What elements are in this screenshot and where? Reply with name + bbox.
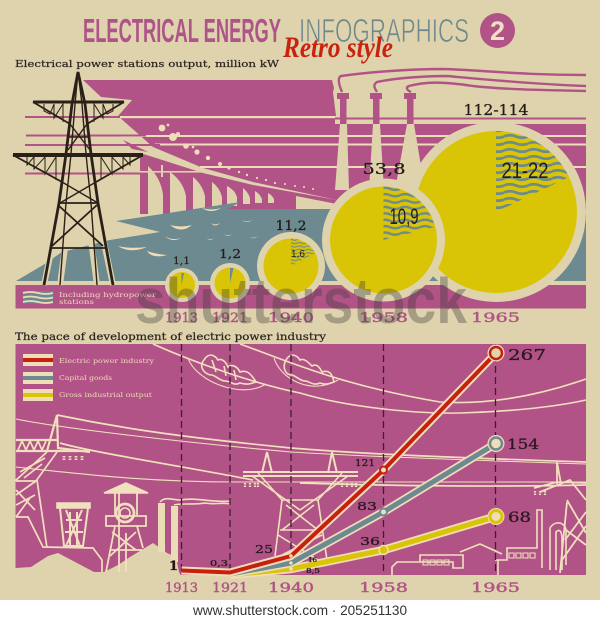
chart values: 267 <box>508 346 546 364</box>
pie chart: 1940: 1,6 <box>291 249 305 260</box>
series: capital goods <box>230 435 504 574</box>
bottom chart year axis <box>165 581 520 596</box>
smoke trails <box>339 69 586 92</box>
chart legend <box>23 354 154 401</box>
pie chart: 1965 <box>406 101 586 302</box>
top chart year axis: 1965 <box>471 311 520 326</box>
legend text: stations <box>59 298 94 306</box>
panel: development line chart background <box>15 344 586 576</box>
footer strip: www.shutterstock.com · 205251130 <box>192 602 407 618</box>
horizontal power lines <box>118 116 586 168</box>
chart values: 36 <box>360 534 380 548</box>
pie chart: 1913: 1,1 <box>173 255 190 267</box>
number badge: 2 <box>490 16 505 46</box>
chart values: 121 <box>355 458 375 469</box>
pie chart: 1921: 1,2 <box>219 246 241 261</box>
top chart year axis: 1921 <box>212 311 248 326</box>
left lattice tower <box>15 415 102 572</box>
chart values: 25 <box>255 542 273 556</box>
series: gross industrial output <box>230 508 504 575</box>
spray dots <box>159 124 314 190</box>
legend band <box>16 285 586 308</box>
pie chart: 1958 <box>322 160 445 302</box>
water <box>16 202 586 281</box>
pie chart: 1958: 10,9 <box>390 204 418 229</box>
chimneys <box>335 93 425 190</box>
chart values: 1 <box>169 559 178 574</box>
centre lattice tower <box>243 452 358 560</box>
transmission tower <box>13 72 143 285</box>
chart values: 16 <box>308 557 317 564</box>
insulator clusters <box>188 355 338 390</box>
chart values: 68 <box>508 510 531 526</box>
wave legend <box>23 291 157 306</box>
bridge deck and piers <box>140 153 337 214</box>
mine headframe <box>57 503 90 546</box>
small chimneys and smoke <box>158 499 230 562</box>
magenta background: sky <box>83 80 586 226</box>
title: ELECTRICAL ENERGY <box>83 12 281 49</box>
pie chart: 1913 <box>165 255 199 302</box>
heading: pace of development: The pace of development of electric power industry <box>15 332 327 343</box>
bottom chart year axis: 1913 <box>165 581 198 596</box>
series: electric power industry <box>182 344 504 572</box>
top chart year axis: 1913 <box>165 311 198 326</box>
title: INFOGRAPHICS <box>299 12 469 49</box>
panel: power stations illustration <box>16 69 586 308</box>
pie chart: 1965: 112-114 <box>464 101 528 119</box>
line chart series <box>182 344 504 575</box>
subtitle: retro style: Retro style <box>282 31 393 64</box>
chart values: 83 <box>357 499 377 513</box>
pie chart: 1958: 53,8 <box>362 160 406 178</box>
bottom chart year axis: 1921 <box>212 581 248 596</box>
top chart year axis: 1958 <box>359 311 408 326</box>
chart values: 0,3 <box>210 559 228 568</box>
bottom chart year axis: 1940 <box>268 581 314 596</box>
footer strip <box>0 600 600 620</box>
legend wave icon <box>23 291 53 304</box>
top chart year axis <box>165 311 520 326</box>
overhead cables <box>16 344 586 486</box>
legend: capital goods: Capital goods <box>59 374 113 382</box>
water ripples <box>118 208 258 256</box>
chart values: 154 <box>507 437 539 453</box>
chart values <box>169 346 546 575</box>
legend: gross industrial output: Gross industrial output <box>59 391 152 399</box>
legend text: Including hydropower <box>59 291 157 299</box>
right lattice tower <box>534 462 586 573</box>
chart values: 8,5 <box>306 568 320 575</box>
factory outline <box>392 510 566 575</box>
number badge <box>480 13 515 48</box>
pie chart: 1940 <box>257 219 325 300</box>
legend: electric power industry: Electric power industry <box>59 357 154 365</box>
stock watermark: shutterstock <box>135 265 467 337</box>
dashed year guides <box>182 344 496 575</box>
pie chart: 1965: 21-22 <box>502 158 548 183</box>
bottom chart year axis: 1958 <box>359 581 408 596</box>
bottom chart year axis: 1965 <box>471 581 520 596</box>
pie chart: 1940: 11,2 <box>276 219 306 234</box>
top chart year axis: 1940 <box>268 311 314 326</box>
heading: power stations output: Electrical power stations output, million kW <box>15 59 279 70</box>
watch tower <box>104 483 148 572</box>
pie chart: 1921 <box>210 246 250 303</box>
ground and hills <box>16 543 181 576</box>
